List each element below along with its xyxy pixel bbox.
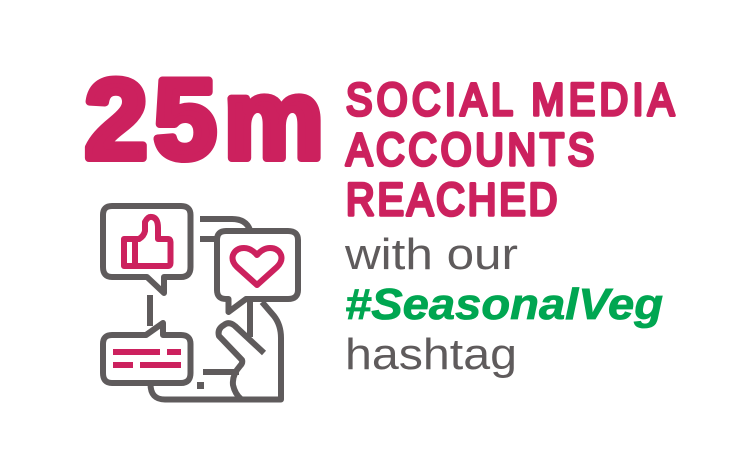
icon: connector lines: [150, 219, 250, 326]
heading: social media accounts reached: ACCOUNTS: [346, 125, 594, 175]
heading: social media accounts reached: SOCIAL MEDIA: [346, 75, 675, 125]
icon: thumbs-up speech bubble: [103, 206, 190, 293]
text: hashtag: hashtag: [345, 330, 517, 379]
big number: 25m: 25m: [85, 57, 324, 182]
text: #SeasonalVeg hashtag: #SeasonalVeg: [345, 280, 663, 329]
icon: hand: [150, 302, 281, 400]
heading: social media accounts reached: REACHED: [346, 175, 557, 225]
icon: hand holding social media bubbles: [103, 206, 298, 400]
heading: social media accounts reached: [346, 75, 675, 225]
text: with our: with our: [344, 230, 518, 279]
icon: comment speech bubble: [103, 323, 190, 383]
icon: heart speech bubble: [217, 231, 298, 312]
icon: small square dot: [197, 382, 204, 389]
